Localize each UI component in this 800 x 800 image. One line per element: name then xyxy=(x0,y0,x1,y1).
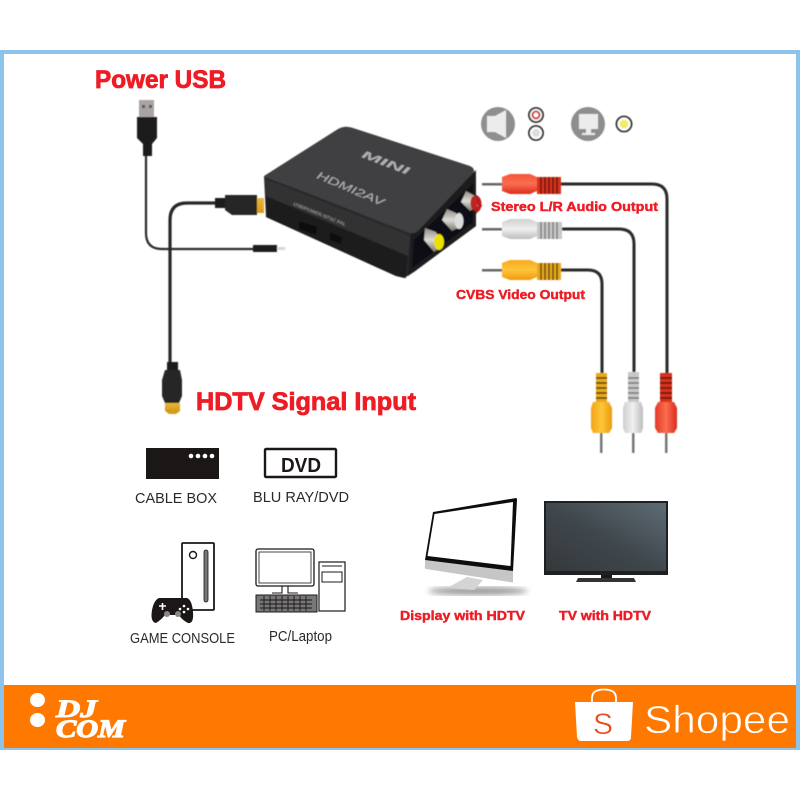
label: GAME CONSOLE: GAME CONSOLE xyxy=(130,630,235,647)
port labels: USB/POWER NTSC PAL xyxy=(293,201,347,227)
icon: DVD: DVD xyxy=(281,455,321,477)
logo: DJ COM xyxy=(30,693,126,743)
AV jacks xyxy=(412,184,473,268)
label: Display with HDTV: Display with HDTV xyxy=(400,608,525,623)
icon: TV xyxy=(544,501,668,582)
label: BLU RAY/DVD: BLU RAY/DVD xyxy=(253,489,349,506)
logo: DJ COM: COM xyxy=(56,716,126,743)
footer banner xyxy=(4,685,796,748)
HDMI2AV converter box xyxy=(264,127,482,278)
icon: DVD xyxy=(265,449,336,477)
logo: DJ COM: DJ xyxy=(55,696,99,723)
logo: Shopee xyxy=(575,690,790,742)
HDMI2AV label: HDMI2AV xyxy=(315,169,388,209)
MINI logo: MINI xyxy=(360,148,412,177)
heading: Power USB: Power USB xyxy=(95,66,226,94)
HDMI input cable xyxy=(162,195,264,414)
audio and video icons xyxy=(481,107,632,141)
RCA cable: white xyxy=(482,219,643,453)
logo: Shopee: Shopee xyxy=(644,699,790,742)
USB power cable xyxy=(137,100,285,252)
heading: HDTV Signal Input: HDTV Signal Input xyxy=(196,388,417,416)
RCA cable: yellow xyxy=(482,260,612,453)
icon: desktop display xyxy=(425,498,528,595)
label: CVBS Video Output: CVBS Video Output xyxy=(456,287,586,302)
icon: cable box xyxy=(146,448,219,479)
label: CABLE BOX: CABLE BOX xyxy=(135,490,217,507)
label: TV with HDTV: TV with HDTV xyxy=(559,608,651,623)
label: Stereo L/R Audio Output: Stereo L/R Audio Output xyxy=(491,199,659,214)
label: PC/Laptop: PC/Laptop xyxy=(269,628,332,645)
logo: Shopee: S xyxy=(593,708,613,741)
icon: game console xyxy=(152,543,214,623)
RCA cable: red xyxy=(482,174,677,453)
icon: PC xyxy=(256,549,345,612)
